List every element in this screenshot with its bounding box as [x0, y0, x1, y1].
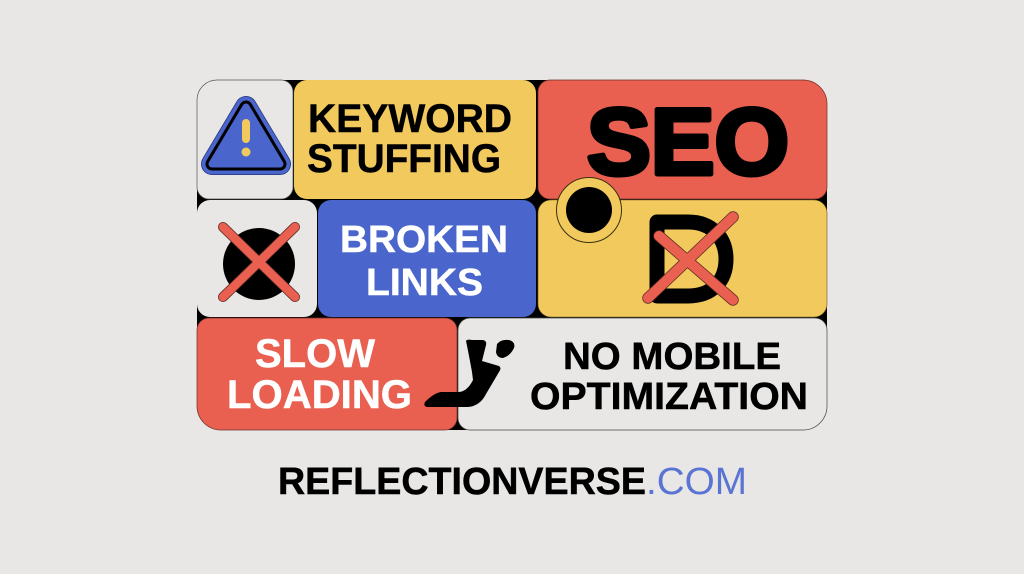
panel: keyword stuffing [294, 80, 536, 199]
panel: broken links [318, 200, 536, 317]
panel: SEO [538, 80, 827, 199]
panel: slow loading: SLOW [255, 332, 375, 376]
panel: X icon tile [197, 200, 317, 317]
panel: warning icon tile [197, 80, 293, 199]
icon: warning triangle [212, 107, 280, 164]
panel: keyword stuffing: STUFFING [307, 137, 501, 181]
panel: keyword stuffing: KEYWORD [308, 97, 512, 141]
panel: broken links: LINKS [366, 262, 483, 304]
footer: website name: REFLECTIONVERSE [278, 461, 646, 503]
icon: D crossed out [648, 217, 733, 300]
panel: slow loading: LOADING [227, 373, 412, 417]
board: tile grid [197, 80, 827, 430]
panel: crossed-out D [538, 200, 827, 317]
panel: broken links: BROKEN [340, 219, 508, 261]
icon: black circle crossed out [223, 227, 295, 300]
panel: no mobile optimization: NO MOBILE [563, 336, 781, 378]
panel: slow loading [197, 318, 457, 430]
icon: broken mobile glyph [424, 340, 514, 407]
panel: SEO: SEO [587, 89, 789, 194]
panel: no mobile optimization: OPTIMIZATION [530, 376, 808, 418]
footer: website name: .COM [646, 461, 747, 503]
panel: no mobile optimization [458, 318, 827, 430]
icon: ringed black dot [556, 178, 622, 242]
